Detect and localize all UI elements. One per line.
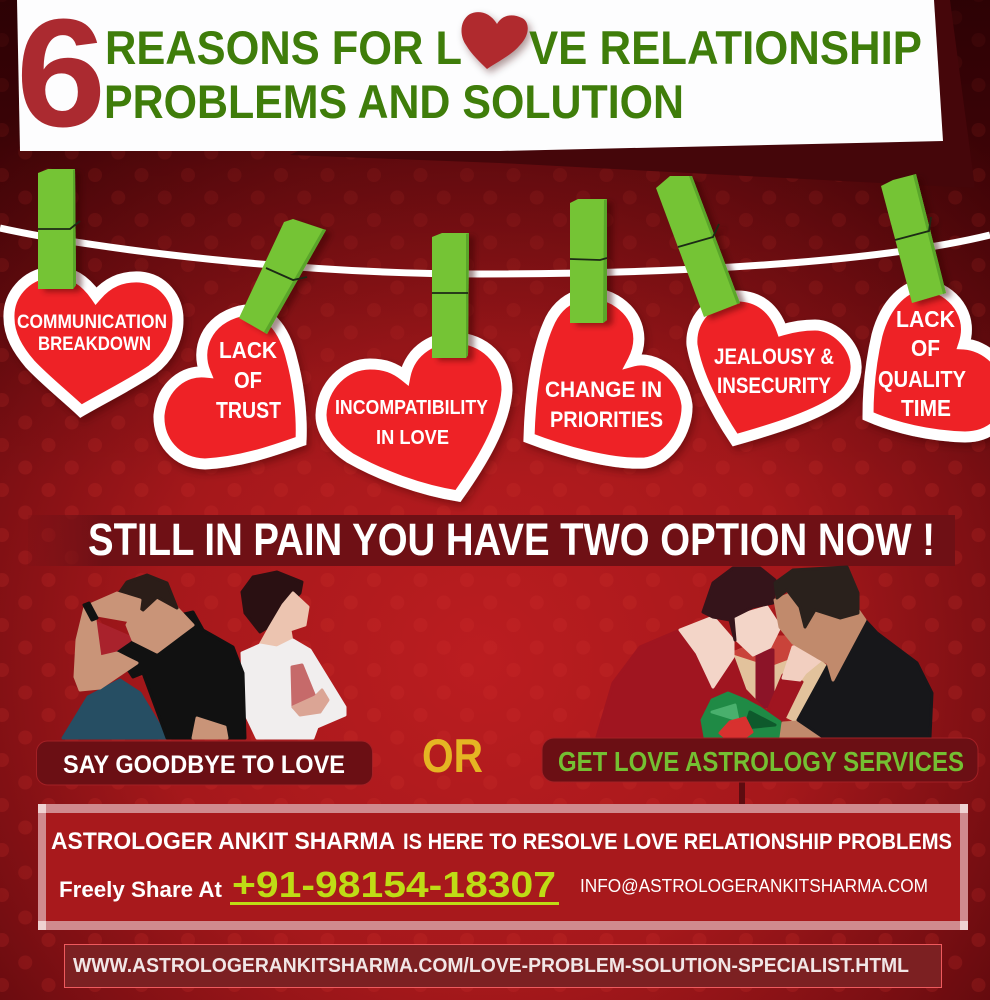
heart: change in priorities: PRIORITIES bbox=[550, 407, 663, 432]
website url box: WWW.ASTROLOGERANKITSHARMA.COM/LOVE-PROBLEM-SOLUTION-SPECIALIST.HTML bbox=[73, 955, 909, 977]
heart: jealousy and insecurity bbox=[692, 296, 856, 440]
heart: lack of trust: TRUST bbox=[216, 397, 281, 423]
phone underline bbox=[230, 902, 559, 905]
clothespin 5 bbox=[656, 176, 740, 317]
woman bbox=[242, 572, 345, 738]
clothespin 3 bbox=[432, 233, 469, 358]
man bbox=[63, 575, 245, 738]
heart: jealousy and insecurity: INSECURITY bbox=[717, 373, 831, 398]
heart: communication breakdown: BREAKDOWN bbox=[38, 334, 151, 355]
freely share: Freely Share At bbox=[59, 877, 223, 902]
pillow behind bbox=[733, 637, 827, 723]
clothespin 6 bbox=[881, 174, 946, 303]
heart: lack of quality time bbox=[868, 285, 990, 437]
clothespin 1 bbox=[38, 169, 80, 289]
heart: incompatibility in love bbox=[321, 338, 507, 496]
or label: OR bbox=[422, 729, 483, 782]
connector bbox=[739, 782, 745, 805]
label: get love astrology services bbox=[542, 738, 978, 782]
title line 1 start: REASONS FOR L bbox=[105, 21, 462, 74]
statement: IS HERE TO RESOLVE LOVE RELATIONSHIP PROBLEMS bbox=[403, 829, 952, 854]
heart: lack of quality time: OF bbox=[911, 335, 940, 361]
label: say goodbye to love: SAY GOODBYE TO LOVE bbox=[63, 751, 345, 779]
heart: change in priorities bbox=[529, 294, 687, 463]
heart: lack of trust: LACK bbox=[219, 337, 277, 363]
title line 1 end: VE RELATIONSHIP bbox=[529, 21, 922, 74]
panel: contact info bbox=[38, 804, 968, 930]
heart: lack of trust bbox=[159, 310, 301, 464]
email: INFO@ASTROLOGERANKITSHARMA.COM bbox=[580, 876, 928, 896]
title card shadow bbox=[290, 0, 975, 188]
heart: lack of quality time: QUALITY bbox=[878, 366, 966, 392]
label: say goodbye to love bbox=[36, 741, 372, 785]
heart: change in priorities: CHANGE IN bbox=[545, 377, 662, 402]
heart: lack of quality time: TIME bbox=[901, 395, 951, 421]
heart: communication breakdown: COMMUNICATION bbox=[17, 312, 167, 333]
astrologer name: ASTROLOGER ANKIT SHARMA bbox=[51, 828, 395, 855]
website url box bbox=[64, 944, 942, 988]
photo: happy couple with gift bbox=[597, 567, 932, 737]
photo: unhappy couple bbox=[63, 572, 345, 738]
heart: incompatibility in love: INCOMPATIBILITY bbox=[335, 397, 489, 419]
clothespin 4 bbox=[570, 199, 607, 323]
heart: jealousy and insecurity: JEALOUSY & bbox=[714, 344, 834, 369]
heart: lack of trust: OF bbox=[234, 367, 262, 393]
gift bow bbox=[702, 693, 780, 737]
heart: incompatibility in love: IN LOVE bbox=[376, 427, 449, 449]
heart: lack of quality time: LACK bbox=[896, 306, 955, 332]
icon: heart in title bbox=[461, 12, 528, 69]
string bbox=[0, 228, 990, 274]
clothespin 2 bbox=[239, 219, 326, 334]
title line 2: PROBLEMS AND SOLUTION bbox=[104, 75, 684, 128]
phone number: +91-98154-18307 bbox=[232, 864, 556, 905]
woman bbox=[597, 568, 827, 737]
man bbox=[775, 567, 932, 737]
title card bbox=[16, 0, 943, 159]
heart: communication breakdown bbox=[9, 272, 178, 411]
